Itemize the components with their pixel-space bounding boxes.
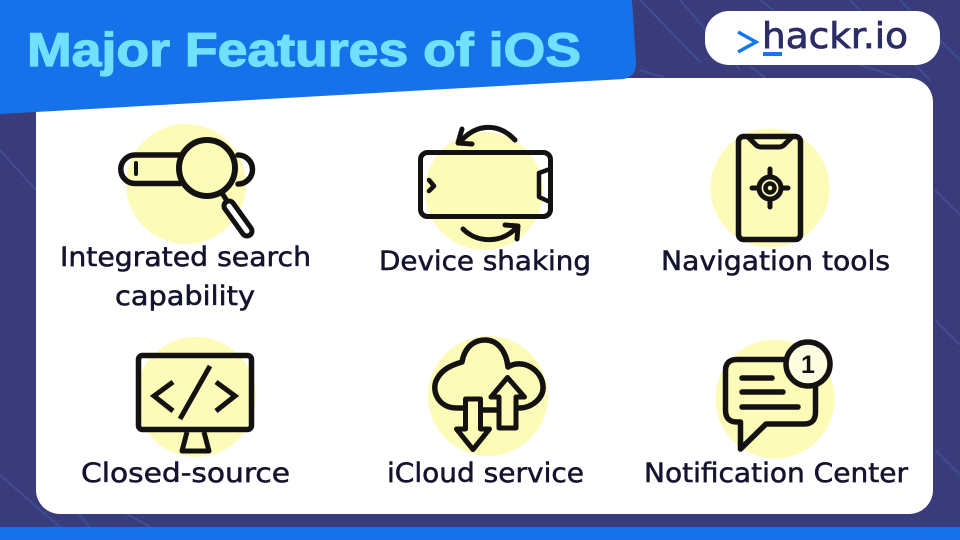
- label: Notification Center: [644, 458, 909, 489]
- label line 2: capability: [115, 281, 255, 312]
- bottom bar: [0, 527, 960, 540]
- icon: phone with target: [738, 136, 800, 240]
- icon: search bar and magnifier: [121, 140, 253, 231]
- label: iCloud service: [387, 458, 584, 489]
- icon: message bubble with badge: [726, 342, 830, 449]
- title banner: [0, 0, 636, 114]
- feature: integrated search: [60, 124, 311, 312]
- label: Integrated search: [60, 242, 311, 273]
- icon: monitor with code: [138, 356, 252, 451]
- icon: rotating phone: [420, 127, 550, 240]
- label: Navigation tools: [661, 246, 890, 277]
- feature: closed-source: [81, 337, 290, 489]
- badge number: 1: [801, 351, 815, 379]
- panel: white card: [36, 78, 933, 514]
- logo: hackr.io: [762, 16, 908, 57]
- label: Closed-source: [81, 458, 290, 489]
- title: Major Features of iOS: [27, 23, 581, 76]
- feature: iCloud service: [387, 336, 584, 489]
- label: Device shaking: [379, 246, 591, 277]
- icon: cloud with arrows: [435, 340, 543, 450]
- logo: [705, 11, 940, 65]
- feature: notification center: [644, 340, 909, 489]
- feature: device shaking: [379, 127, 591, 277]
- feature: navigation tools: [661, 128, 890, 277]
